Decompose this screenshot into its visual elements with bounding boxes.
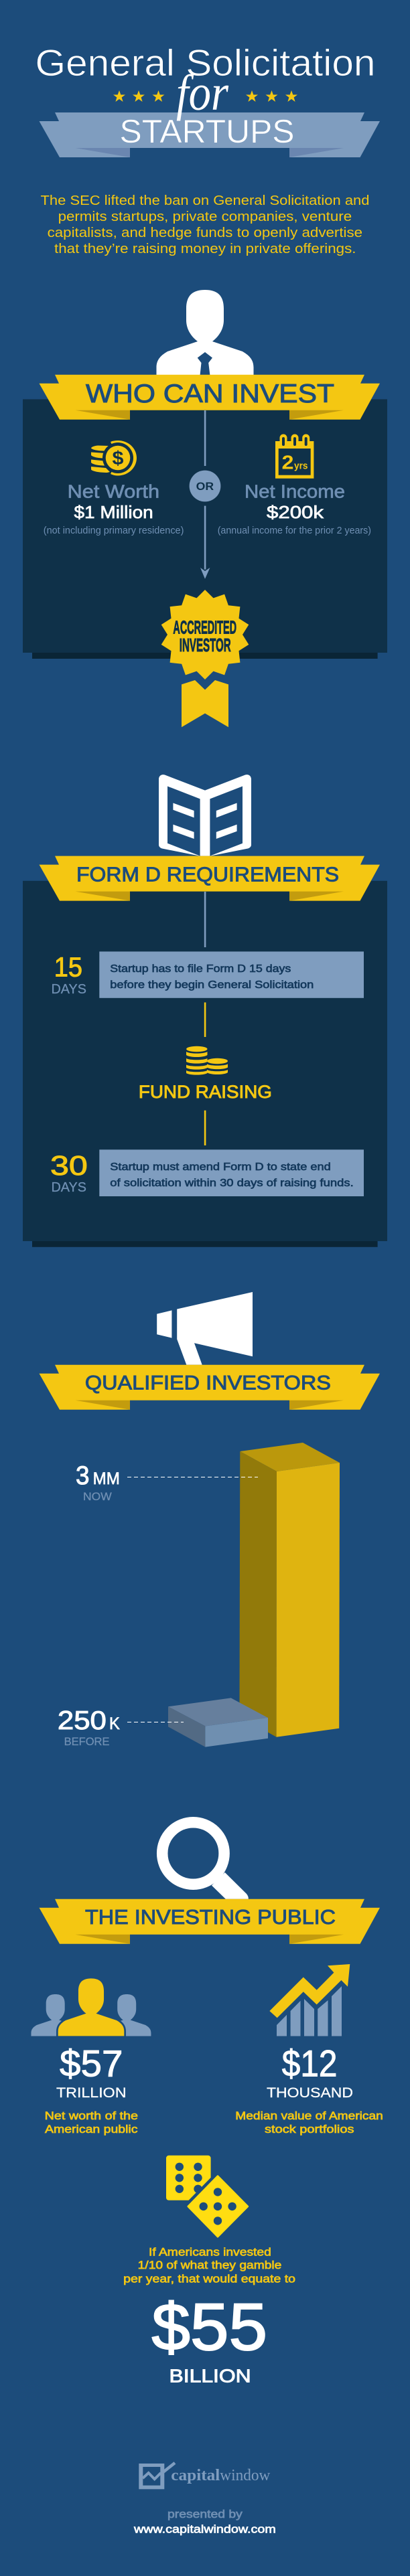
text block: net worth: (not including primary residence): [44, 526, 184, 536]
icon: businessman: [157, 290, 253, 375]
title: General Solicitation: [35, 42, 375, 84]
icon: dice: [166, 2156, 248, 2237]
step: 15 days: before they begin General Solicitation: [110, 979, 314, 991]
connector line with arrow: [200, 410, 210, 579]
text block: net worth: $1 Million: [74, 502, 153, 522]
text block: gambling comparison: [123, 2245, 295, 2285]
ribbon: startups: [39, 112, 380, 157]
badge: or: OR: [196, 480, 214, 493]
timeline connector bottom: [204, 1111, 206, 1145]
heading: form d requirements: FORM D REQUIREMENTS: [76, 862, 339, 886]
icon: calendar: [275, 434, 314, 479]
step: 15 days: 15: [54, 952, 82, 983]
step: 15 days: [51, 951, 364, 998]
stat: 12 thousand: [235, 2042, 383, 2136]
timeline connector middle: [204, 1002, 206, 1037]
stat: 12 thousand: Median value of American: [235, 2110, 383, 2122]
3d bar: before: [168, 1698, 268, 1747]
step: 30 days: Startup must amend Form D to state end: [110, 1161, 331, 1173]
icon: coins: [91, 440, 137, 475]
text block: net income: Net Income: [245, 481, 345, 501]
heading: who can invest: WHO CAN INVEST: [86, 380, 334, 408]
badge: accredited investor: INVESTOR: [180, 635, 231, 655]
subtitle: startups: STARTUPS: [119, 114, 295, 150]
text block: net income: [218, 481, 371, 536]
badge: or: [190, 471, 220, 501]
stat: 57 trillion: American public: [45, 2123, 138, 2136]
footer: presented by: presented by: [167, 2508, 243, 2520]
text block: gambling comparison: If Americans invested: [149, 2245, 271, 2258]
label: 3mm now: MM: [93, 1469, 120, 1488]
label: 3mm now: [76, 1461, 258, 1503]
3d bar: now: [240, 1443, 340, 1737]
panel: form d requirements: [23, 881, 387, 1247]
label: 250k before: 250: [58, 1706, 107, 1735]
intro paragraph: permits startups, private companies, venture: [58, 210, 352, 224]
footer: presented by: [133, 2508, 276, 2536]
icon: calendar: 2: [281, 452, 293, 473]
stat: 55 billion: BILLION: [169, 2366, 251, 2387]
step: 30 days: [50, 1149, 364, 1196]
icon: open book: [159, 775, 251, 856]
text block: net income: $200k: [267, 502, 324, 522]
label: 250k before: BEFORE: [64, 1735, 110, 1748]
stat: 57 trillion: $57: [60, 2042, 123, 2085]
text block: net worth: [44, 481, 184, 536]
icon: stars right: [246, 90, 297, 102]
badge: accredited investor: ACCREDITED: [173, 617, 236, 638]
logo: capital window: capital: [171, 2467, 220, 2484]
step: 15 days: DAYS: [51, 982, 86, 997]
intro paragraph: [40, 193, 370, 256]
icon: magnifying glass: [162, 1822, 249, 1899]
step: 30 days: 30: [50, 1150, 88, 1181]
icon: group of people: [31, 1978, 151, 2040]
icon: rising chart: [269, 1964, 350, 2036]
heading: qualified investors: QUALIFIED INVESTORS: [85, 1372, 331, 1394]
stat: 12 thousand: stock portfolios: [265, 2123, 354, 2136]
stat: 57 trillion: Net worth of the: [45, 2110, 138, 2122]
logo: capital window: [139, 2463, 271, 2489]
text block: net worth: Net Worth: [68, 481, 159, 501]
ribbon: investing public: [39, 1899, 380, 1944]
label: 3mm now: 3: [76, 1461, 90, 1490]
label: 250k before: [58, 1706, 184, 1748]
step: 15 days: Startup has to file Form D 15 days: [110, 963, 291, 975]
label: fund raising: FUND RAISING: [139, 1082, 272, 1102]
icon: calendar: yrs: [294, 461, 308, 471]
icon: stars left: [113, 90, 165, 102]
icon: coins: $: [113, 448, 123, 469]
text block: gambling comparison: per year, that would equate to: [123, 2272, 295, 2285]
ribbon: form d: [39, 856, 380, 901]
intro paragraph: that they’re raising money in private offerings.: [54, 242, 356, 256]
stat: 57 trillion: TRILLION: [56, 2085, 126, 2101]
stat: 57 trillion: [45, 2042, 138, 2136]
ribbon: who can invest: [39, 375, 380, 420]
stat: 12 thousand: $12: [282, 2042, 338, 2085]
stat: 55 billion: $55: [151, 2289, 267, 2364]
timeline connector top: [204, 892, 206, 947]
intro paragraph: The SEC lifted the ban on General Solicitation and: [40, 193, 370, 208]
heading: the investing public: THE INVESTING PUBLIC: [85, 1905, 336, 1929]
footer: presented by: www.capitalwindow.com: [133, 2522, 276, 2536]
icon: megaphone: [157, 1292, 253, 1365]
intro paragraph: capitalists, and hedge funds to openly advertise: [48, 226, 362, 240]
step: 30 days: of solicitation within 30 days of raising funds.: [110, 1178, 354, 1189]
label: 250k before: K: [109, 1714, 120, 1733]
step: 30 days: DAYS: [51, 1180, 86, 1195]
text block: gambling comparison: 1/10 of what they gamble: [138, 2259, 281, 2271]
icon: coin stacks: [186, 1046, 228, 1075]
ribbon: qualified investors: [39, 1365, 380, 1410]
label: 3mm now: NOW: [83, 1490, 112, 1503]
stat: 12 thousand: THOUSAND: [267, 2085, 353, 2101]
badge: accredited investor: [161, 590, 249, 727]
script word: for: for: [176, 65, 228, 121]
panel: who can invest: [23, 399, 387, 659]
logo: capital window: window: [220, 2467, 271, 2484]
text block: net income: (annual income for the prior 2 years): [218, 526, 371, 536]
